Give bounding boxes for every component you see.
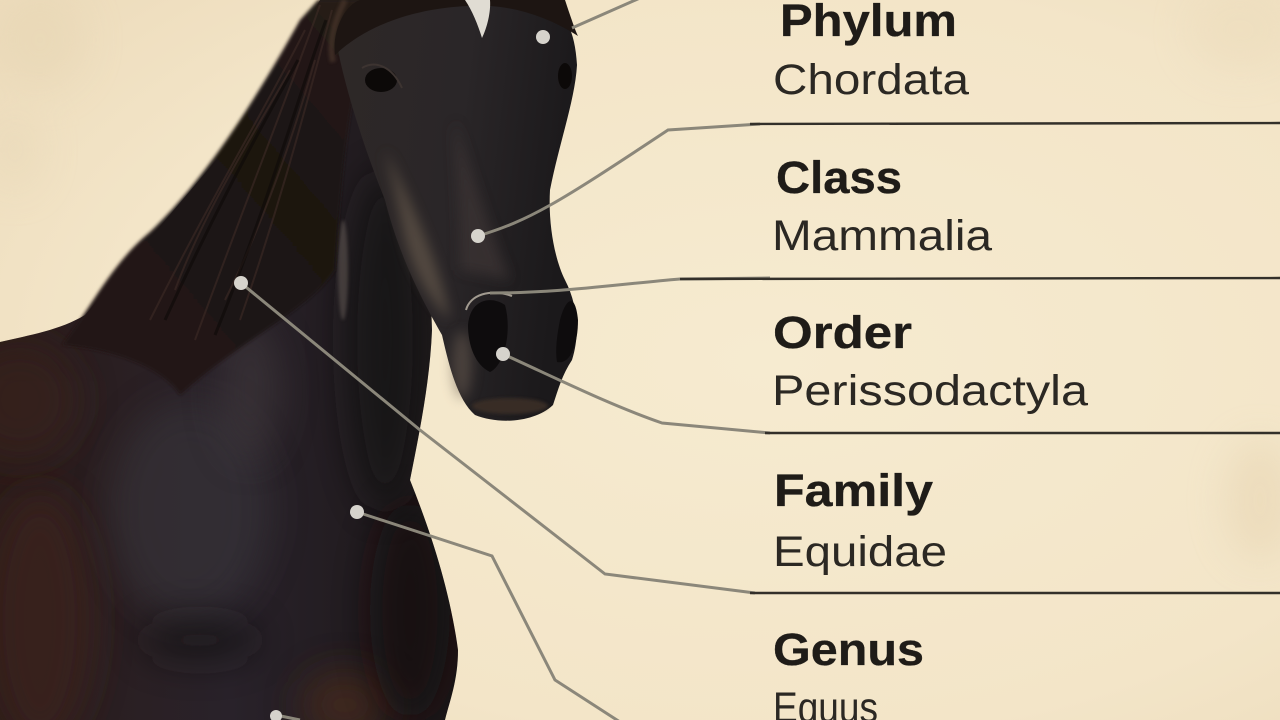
white star marking bbox=[465, 0, 490, 38]
phylum bbox=[773, 0, 969, 104]
genus: Genus bbox=[773, 624, 924, 675]
class bbox=[772, 152, 992, 260]
family: Family bbox=[774, 465, 933, 516]
mane bbox=[62, 0, 400, 395]
phylum: Chordata bbox=[773, 56, 969, 104]
class: Mammalia bbox=[772, 212, 992, 260]
genus leader bbox=[234, 276, 755, 593]
mane strands bbox=[150, 5, 332, 340]
eye right bbox=[558, 63, 572, 89]
order bbox=[772, 307, 1088, 415]
horizontal rules bbox=[680, 123, 1280, 593]
parchment stains bbox=[0, 0, 1280, 560]
leader lines and anchor dots bbox=[234, 0, 770, 720]
genus bbox=[773, 624, 924, 720]
order leader bbox=[490, 278, 770, 293]
class: Class bbox=[776, 152, 902, 203]
order: Perissodactyla bbox=[772, 367, 1088, 415]
nostrils bbox=[466, 293, 578, 372]
family: Equidae bbox=[773, 528, 947, 576]
head highlights bbox=[385, 120, 548, 414]
class leader bbox=[471, 124, 760, 243]
taxonomy labels bbox=[772, 0, 1088, 720]
forelock bbox=[335, 0, 578, 55]
body shading bbox=[0, 170, 450, 720]
horse illustration bbox=[0, 0, 578, 720]
horse body and neck bbox=[0, 0, 458, 720]
family leader bbox=[496, 347, 770, 433]
phylum leader bbox=[536, 0, 640, 44]
family bbox=[773, 465, 947, 576]
species leader bbox=[350, 505, 620, 720]
eye left bbox=[362, 65, 402, 92]
lower leader bbox=[270, 710, 300, 720]
order: Order bbox=[773, 307, 912, 358]
head bbox=[336, 0, 577, 421]
